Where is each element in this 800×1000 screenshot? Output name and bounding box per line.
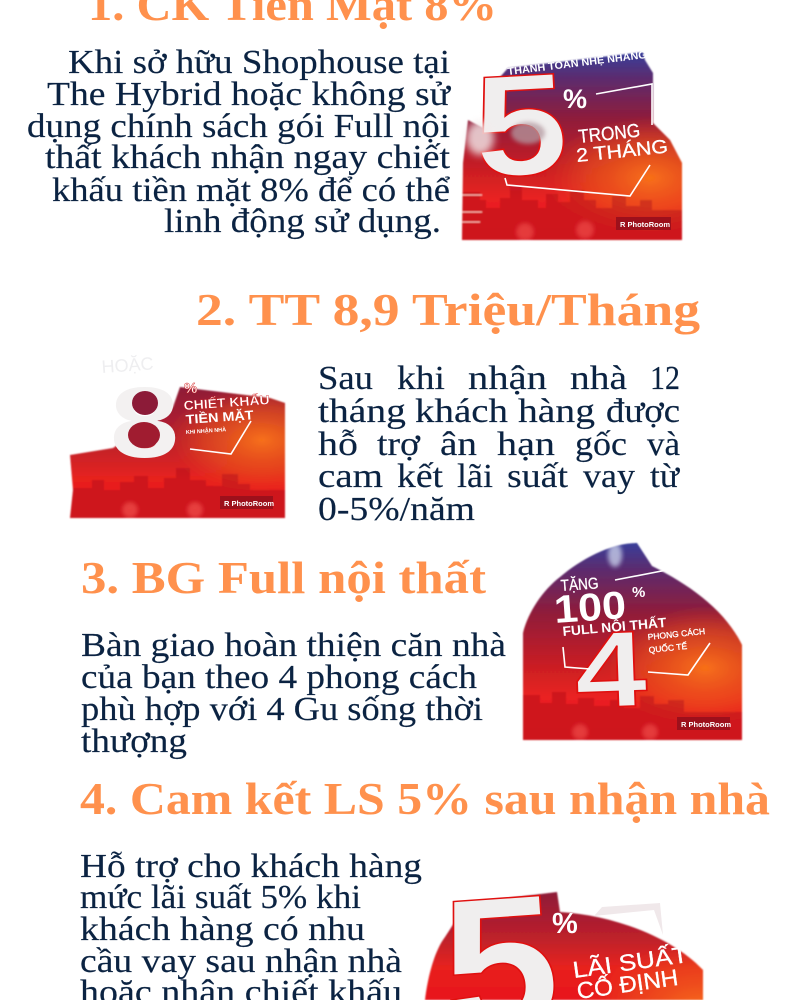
text block 2: ân [440, 426, 477, 463]
frame stroke [594, 903, 663, 935]
badge: R PhotoRoom [224, 499, 274, 508]
text block 2: suất [507, 458, 569, 495]
label: TẶNG [560, 573, 599, 595]
text block 2: kết [397, 458, 444, 495]
text block 2 [318, 360, 681, 528]
top label: THANH TOÁN NHẸ NHÀNG [507, 48, 647, 78]
text block 2: được [606, 393, 680, 430]
number 100: 100 [553, 584, 627, 632]
percent: % [632, 584, 645, 601]
percent: % [563, 84, 587, 114]
percent: % [552, 908, 578, 940]
badge: R PhotoRoom [620, 220, 670, 229]
text block 1: The Hybrid hoặc không sử [47, 76, 452, 113]
caption small: KHI NHẬN NHÀ [186, 426, 226, 436]
caption small: PHONG CÁCH [647, 626, 706, 642]
text block 4: mức lãi suất 5% khi [80, 879, 361, 916]
text block 2: hạn [497, 426, 555, 463]
text block 3 [81, 627, 506, 760]
text block 2: và [647, 426, 680, 463]
text block 2: tháng [318, 393, 406, 430]
text block 2: vay [583, 458, 635, 495]
text block 2: nhận [468, 360, 547, 397]
big number 8: 8 [110, 366, 179, 478]
image: 5% trong 2 tháng [460, 51, 684, 242]
text block 3: Bàn giao hoàn thiện căn nhà [81, 627, 506, 664]
text block 3: phù hợp với 4 Gu sống thời [81, 691, 483, 728]
text block 2: nhà [570, 360, 627, 397]
badge [677, 717, 731, 730]
text block 2: hàng [518, 393, 595, 430]
text block 2: khi [397, 360, 445, 397]
text block 1: thất khách nhận ngay chiết [45, 139, 451, 176]
heading 4: 4. Cam kết LS 5% sau nhận nhà [80, 773, 770, 824]
text block 2: 0-5%/năm [318, 491, 475, 528]
text block 4: Hỗ trợ cho khách hàng [80, 848, 422, 885]
frame lines [563, 562, 710, 675]
text block 2: gốc [575, 426, 627, 463]
caption: TRONG [577, 121, 641, 148]
badge: R PhotoRoom [681, 720, 731, 729]
text block 1: Khi sở hữu Shophouse tại [68, 44, 450, 81]
heading 2: 2. TT 8,9 Triệu/Tháng [196, 284, 700, 335]
image: 5% lãi suất cố định [424, 891, 704, 1000]
counters of 8 [128, 391, 160, 448]
caption: LÃI SUẤT [571, 940, 690, 983]
text block 2: trợ [377, 426, 421, 463]
frame lines [190, 421, 251, 454]
text block 1: khấu tiền mặt 8% để có thể [52, 172, 450, 209]
badge [616, 217, 671, 230]
text block 2: cam [318, 458, 383, 495]
text block 2: từ [650, 458, 681, 495]
clouds [466, 121, 545, 155]
caption: FULL NỘI THẤT [562, 615, 668, 639]
text block 2: khách [415, 393, 508, 430]
text block 2: lãi [457, 458, 493, 495]
heading 3: 3. BG Full nội thất [81, 552, 487, 603]
text block 2: Sau [318, 360, 373, 397]
text block 3: thượng [81, 723, 187, 760]
text block 1: dụng chính sách gói Full nội [27, 108, 450, 145]
caption line 2: 2 THÁNG [575, 136, 669, 167]
text block 3: của bạn theo 4 phong cách [81, 659, 477, 696]
caption line 2: TIỀN MẶT [185, 407, 254, 427]
big number 4: 4 [573, 609, 649, 732]
big number 5: 5 [470, 43, 571, 208]
percent: % [184, 380, 197, 397]
faded label: HOẶC [101, 353, 154, 377]
image: 8% chiết khấu [69, 355, 286, 520]
text block 1 [27, 44, 452, 240]
text block 1: linh động sử dụng. [164, 203, 441, 240]
caption small line 2: QUỐC TẾ [648, 640, 688, 655]
text block 4 [80, 848, 422, 1000]
text block 4: cầu vay sau nhận nhà [80, 943, 402, 980]
image: tặng 100% full nội thất [522, 542, 744, 742]
text block 2: 12 [650, 360, 680, 397]
text block 2: hỗ [318, 426, 358, 463]
text block 4: khách hàng có nhu [80, 911, 365, 948]
frame lines [505, 84, 652, 196]
caption: CHIẾT KHẤU [183, 392, 270, 413]
badge [220, 496, 274, 509]
